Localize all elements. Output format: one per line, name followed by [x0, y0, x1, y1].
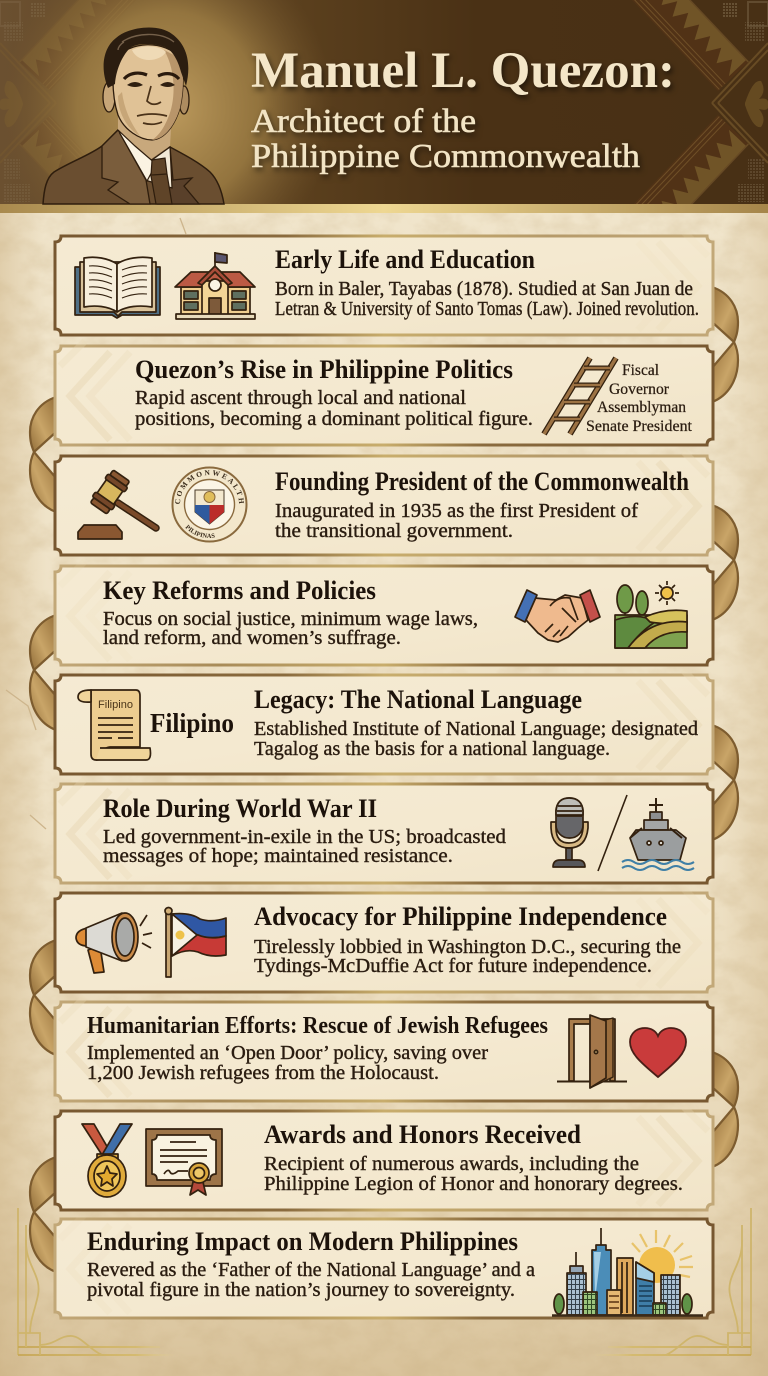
corner ornament right: [593, 1208, 751, 1355]
body text: Inaugurated in 1935 as the first President of: [275, 500, 638, 522]
body text: Recipient of numerous awards, including the: [264, 1153, 639, 1175]
neck: [118, 112, 172, 160]
icon: handshake: [515, 590, 600, 642]
icon: Philippine flag: [165, 908, 226, 977]
icon: commonwealth seal: [172, 466, 248, 542]
panel: awards and honors: [55, 1106, 713, 1210]
icon: gavel: [78, 469, 156, 539]
tie: [151, 158, 172, 204]
heading: Quezon’s Rise in Philippine Politics: [135, 355, 513, 384]
body text: positions, becoming a dominant political figure.: [135, 408, 533, 430]
icon: school building: [175, 252, 255, 319]
title: Manuel L. Quezon:: [251, 43, 675, 99]
shirt collar: [118, 130, 172, 188]
icon: megaphone: [76, 913, 152, 973]
icon: city skyline with sun: [552, 1228, 703, 1316]
textile pattern left: [0, 0, 98, 202]
body text: Philippine Legion of Honor and honorary degrees.: [264, 1173, 683, 1195]
panel: enduring impact: [55, 1214, 713, 1318]
body text: [87, 1259, 535, 1301]
corner ornament left: [18, 1208, 175, 1355]
heading: Role During World War II: [103, 794, 377, 823]
body text: land reform, and women’s suffrage.: [103, 627, 401, 649]
portrait of Quezon: [43, 27, 224, 204]
icon: commonwealth seal: PILIPINAS: [185, 524, 215, 538]
icon: microphone: [551, 798, 588, 867]
body text: [275, 278, 699, 320]
heading: Humanitarian Efforts: Rescue of Jewish Refugees: [87, 1013, 548, 1039]
hair: [104, 27, 188, 88]
textile pattern right: [634, 0, 768, 204]
heading: Enduring Impact on Modern Philippines: [87, 1227, 518, 1256]
heading: Advocacy for Philippine Independence: [254, 902, 667, 931]
heading: Early Life and Education: [275, 245, 535, 274]
body text: [103, 608, 478, 649]
heading: Key Reforms and Policies: [103, 576, 376, 605]
body text: Born in Baler, Tayabas (1878). Studied at San Juan de: [275, 278, 693, 300]
icon: medal: [82, 1124, 132, 1197]
icon: farm fields: [615, 581, 687, 648]
Filipino label: Filipino: [150, 708, 234, 738]
icon: commonwealth seal: COMMONWEALTH: [175, 470, 244, 504]
body text: messages of hope; maintained resistance.: [103, 845, 453, 867]
body text: [103, 826, 506, 867]
panel: world war II: [55, 779, 713, 883]
face: [113, 45, 183, 140]
icon: certificate: [146, 1129, 222, 1195]
slash divider: [598, 795, 627, 871]
portrait glow: [28, 0, 315, 204]
panel: rise in politics: [55, 341, 713, 445]
body text: [264, 1153, 683, 1195]
body text: the transitional government.: [275, 520, 513, 542]
panel: national language: [55, 670, 713, 774]
body text: Tirelessly lobbied in Washington D.C., securing the: [254, 936, 681, 958]
heading: Awards and Honors Received: [264, 1120, 582, 1149]
body text: Established Institute of National Language; designated: [254, 718, 698, 740]
body text: Rapid ascent through local and national: [135, 387, 466, 409]
icon: open book: [75, 257, 160, 318]
body text: [87, 1042, 488, 1084]
body text: Led government-in-exile in the US; broadcasted: [103, 826, 506, 848]
panel: founding president: [54, 454, 714, 556]
header banner: [0, 0, 768, 213]
panel: early life and education: [55, 231, 713, 335]
body text: Tagalog as the basis for a national language.: [254, 738, 610, 760]
ears: [103, 82, 115, 112]
body text: Letran & University of Santo Tomas (Law). Joined revolution.: [275, 298, 699, 320]
career ladder labels: Assemblyman: [597, 399, 686, 416]
title: Architect of the: [251, 103, 476, 140]
icon: scroll: [78, 690, 150, 760]
body text: Tydings-McDuffie Act for future independence.: [254, 955, 652, 977]
connecting ribbons: [30, 287, 738, 1272]
icon: scroll: Filipino: [98, 699, 133, 711]
body text: Implemented an ‘Open Door’ policy, saving over: [87, 1042, 488, 1064]
icon: heart: [630, 1028, 686, 1077]
brows and eyes: [124, 73, 179, 79]
icon: open door: [557, 1015, 627, 1088]
panel: humanitarian efforts: [55, 997, 713, 1101]
heading: Legacy: The National Language: [254, 685, 582, 714]
panel: key reforms: [55, 561, 713, 665]
title: [251, 43, 675, 175]
jacket: [43, 130, 224, 204]
icon: ladder: [544, 358, 616, 434]
nose and mouth: [137, 86, 167, 124]
body text: [275, 500, 638, 542]
body text: [254, 718, 698, 760]
career ladder labels: Senate President: [586, 418, 693, 435]
body text: 1,200 Jewish refugees from the Holocaust.: [87, 1062, 439, 1084]
body text: [254, 936, 681, 977]
career ladder labels: Governor: [609, 381, 670, 398]
title: Philippine Commonwealth: [251, 138, 640, 175]
body text: pivotal figure in the nation’s journey to sovereignty.: [87, 1279, 515, 1301]
icon: warship: [622, 798, 694, 870]
body text: [135, 387, 533, 430]
career ladder labels: [586, 362, 693, 435]
body text: Revered as the ‘Father of the National Language’ and a: [87, 1259, 535, 1281]
body text: Focus on social justice, minimum wage laws,: [103, 608, 478, 630]
career ladder labels: Fiscal: [622, 362, 659, 379]
heading: Founding President of the Commonwealth: [275, 467, 689, 496]
panel: advocacy for independence: [55, 888, 713, 992]
